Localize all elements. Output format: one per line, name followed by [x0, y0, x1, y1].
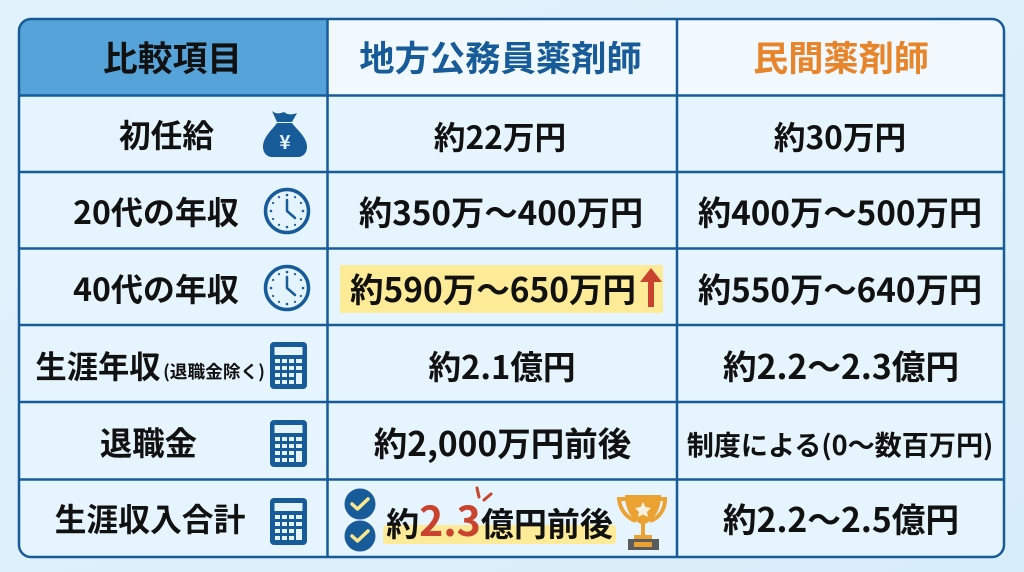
row label: annual income in 40s: 40代の年収	[73, 265, 239, 311]
icon: check mark bottom	[344, 520, 376, 552]
icon: clock 20s	[266, 190, 308, 232]
icon: calculator 3	[270, 498, 307, 545]
value: 20s private: 約400万～500万円	[698, 186, 982, 235]
icon: money bag: ¥	[279, 128, 291, 155]
icon: calculator 1	[270, 342, 307, 389]
header: private pharmacist: 民間薬剤師	[753, 31, 929, 82]
value: lifetime total private: 約2.2～2.5億円	[723, 493, 959, 542]
highlight: 40s public value: 約590万～650万円	[350, 263, 636, 312]
row label: annual income in 20s: 20代の年収	[73, 188, 239, 234]
value: lifetime public: 約2.1億円	[428, 342, 576, 389]
icon: check mark top	[344, 488, 376, 520]
icon: clock 40s	[266, 266, 308, 310]
row label: lifetime total income: 生涯収入合計	[55, 495, 246, 541]
row label: retirement allowance: 退職金	[100, 418, 197, 465]
value: 40s private: 約550万～640万円	[698, 263, 982, 312]
row label: lifetime annual income: 生涯年収	[35, 343, 161, 388]
icon: calculator 2	[270, 420, 307, 467]
value: retirement private: 制度による(0～数百万円)	[687, 424, 993, 463]
value: 20s public: 約350万～400万円	[359, 186, 643, 235]
header: local government pharmacist: 地方公務員薬剤師	[359, 31, 642, 82]
row label: lifetime annual income: (退職金除く)	[163, 358, 265, 384]
row label: starting salary: 初任給	[119, 111, 214, 157]
value: starting salary public: 約22万円	[434, 113, 566, 159]
value: retirement public: 約2,000万円前後	[374, 417, 631, 466]
value: starting salary private: 約30万円	[774, 113, 906, 159]
header: comparison item: 比較項目	[103, 32, 242, 82]
icon: trophy	[619, 495, 665, 550]
value: lifetime private: 約2.2～2.3億円	[723, 340, 959, 389]
row label: lifetime annual income	[35, 343, 265, 388]
highlight: lifetime total public: 約2.3億円前後	[386, 488, 613, 548]
icon: money bag	[263, 111, 307, 157]
